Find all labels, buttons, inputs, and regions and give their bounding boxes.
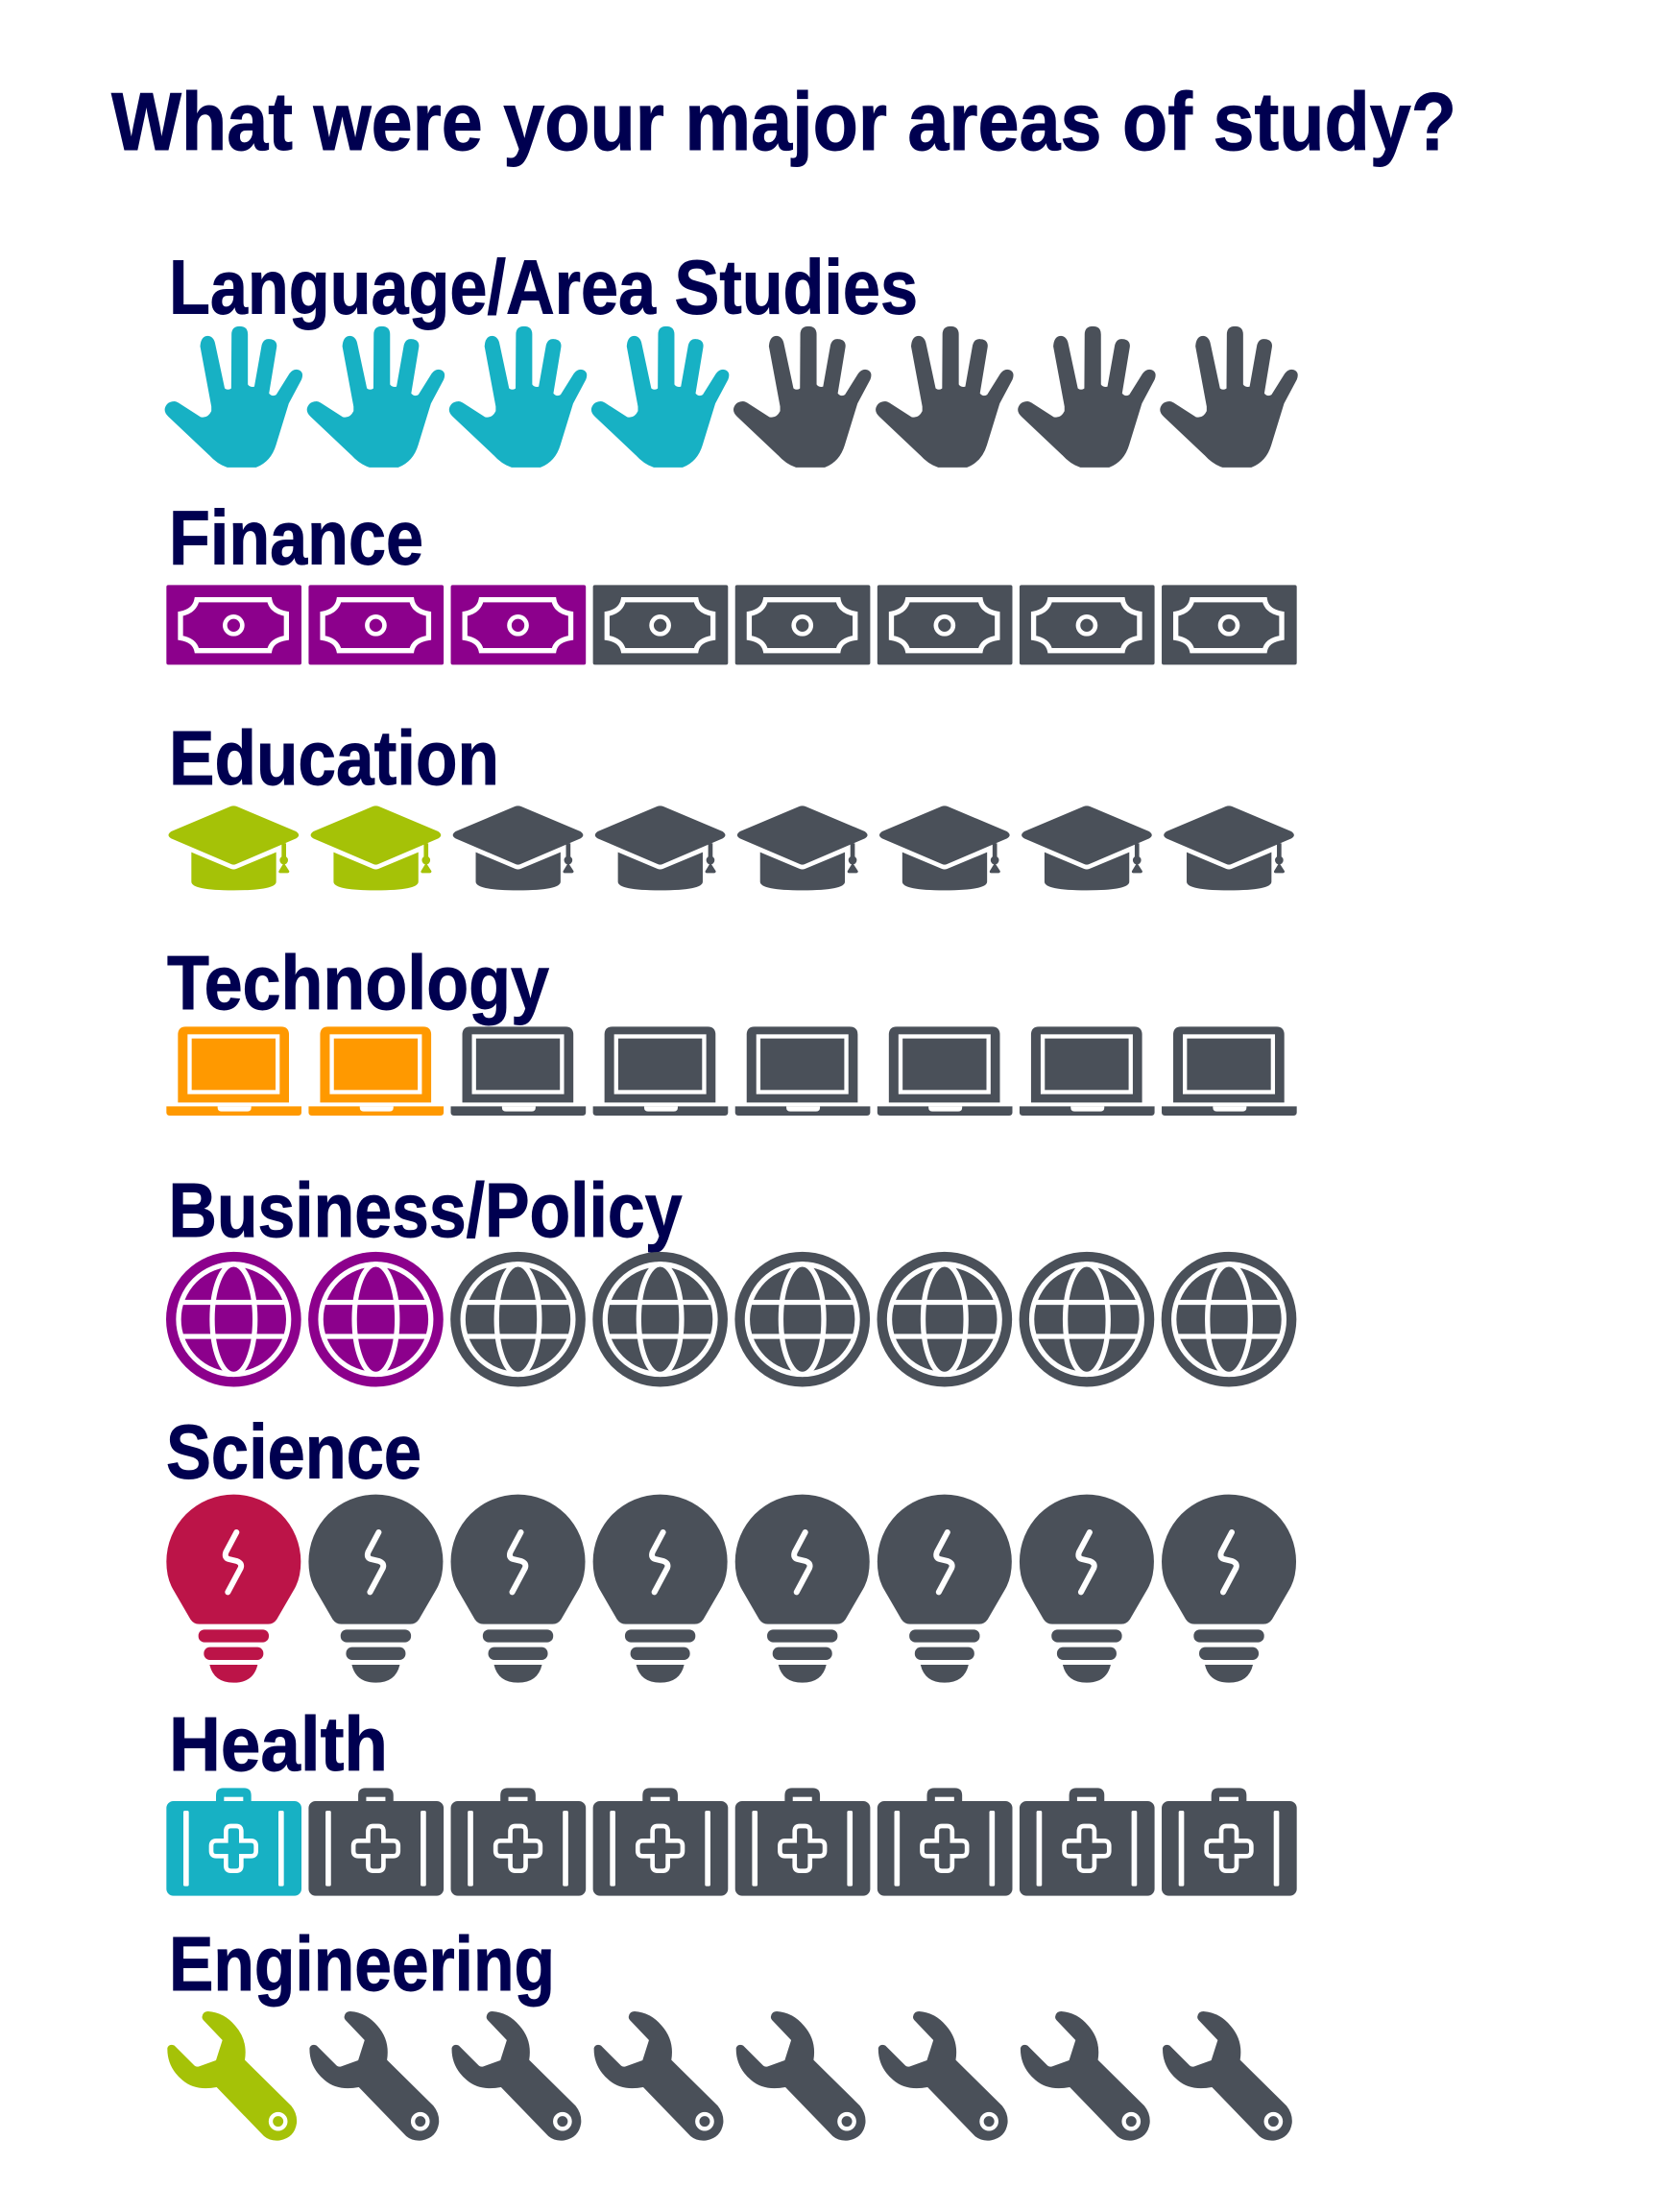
panel: Business/Policy row — [166, 1167, 1296, 1386]
heading: Science: Science — [166, 1409, 421, 1494]
icons: 8 medical kits, 1 highlighted — [166, 1788, 1297, 1896]
heading: Health: Health — [169, 1701, 388, 1787]
panel: Health row — [166, 1701, 1297, 1896]
heading: Business/Policy: Business/Policy — [169, 1167, 683, 1253]
panel: Engineering row — [167, 1921, 1292, 2141]
panel: Finance row — [166, 495, 1297, 664]
panel: Technology row — [166, 940, 1297, 1116]
heading: Education: Education — [169, 715, 499, 801]
panel: Education row — [168, 715, 1294, 890]
title: What were your major areas of study? — [111, 77, 1456, 168]
heading: Finance: Finance — [169, 495, 423, 580]
heading: Language/Area Studies: Language/Area Studies — [169, 244, 918, 330]
icons: 8 wrenches, 1 highlighted — [167, 2011, 1292, 2141]
heading: Engineering: Engineering — [169, 1921, 555, 2007]
panel: Language/Area Studies row — [165, 244, 1297, 467]
icons: 8 light bulbs, 1 highlighted — [166, 1495, 1296, 1683]
heading: Technology: Technology — [167, 940, 549, 1025]
icons: 8 laptops, 2 highlighted — [166, 1026, 1297, 1116]
icons: 8 globes, 2 highlighted — [166, 1252, 1296, 1386]
icons: 8 graduation caps, 2 highlighted — [168, 805, 1294, 890]
panel: Science row — [166, 1409, 1296, 1683]
icons: 8 hands, 4 highlighted — [165, 327, 1297, 467]
icons: 8 banknotes, 3 highlighted — [166, 585, 1297, 664]
